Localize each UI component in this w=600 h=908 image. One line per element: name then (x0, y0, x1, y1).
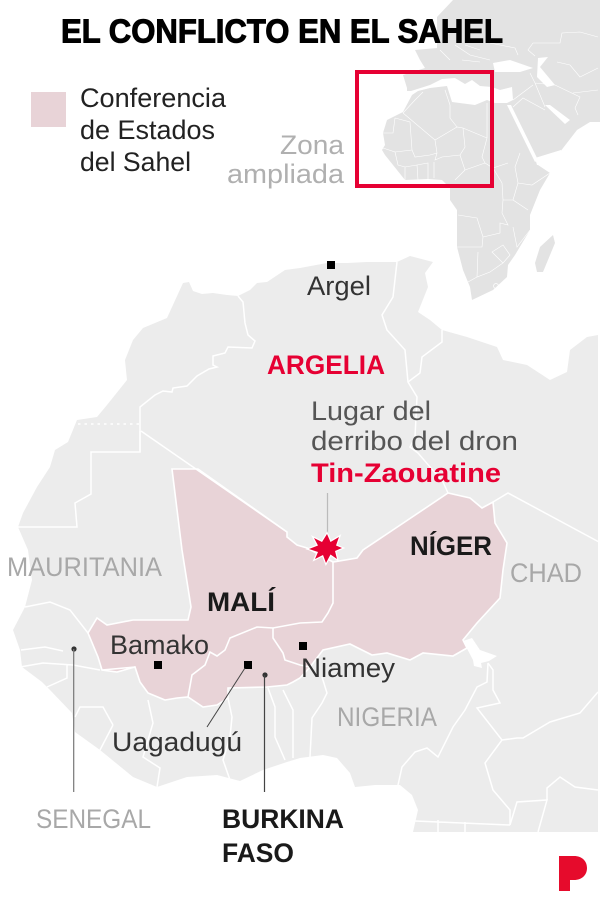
country label: Burkina Faso: FASO (222, 838, 294, 868)
city: Argel (307, 261, 371, 301)
inset: Red Sea (507, 105, 538, 162)
country label: Malí: MALÍ (207, 587, 276, 617)
country label: Níger: NÍGER (410, 531, 492, 561)
inset: Mediterranean Sea (411, 78, 513, 105)
legend (31, 83, 226, 177)
inset highlight rectangle (357, 72, 492, 186)
inset: land mass of Europe, Africa and Asia (382, 0, 600, 300)
label: Argel: Argel (307, 271, 371, 301)
inset: Lesotho outline (494, 284, 498, 288)
label: Uagadugú: Uagadugú (112, 727, 242, 757)
inset world locator map (382, 0, 600, 300)
label: Niamey: Niamey (301, 653, 396, 683)
city: Uagadugú (112, 661, 252, 757)
zoomed map: Conferencia de Estados del Sahel countries (88, 469, 507, 707)
country label: Burkina Faso: BURKINA (222, 804, 344, 834)
legend label: de Estados (80, 115, 215, 145)
icon: explosion star (309, 534, 342, 563)
dot: Senegal (71, 646, 77, 652)
country label: Mauritania: MAURITANIA (7, 552, 162, 582)
inset: Caspian Sea (537, 57, 555, 87)
leader line: Burkina Faso (264, 675, 266, 792)
zoomed map: internal borders of Mali, Burkina Faso and Niger (188, 562, 333, 697)
callout: drone shoot-down site (309, 396, 518, 563)
Burkina Faso pointer (262, 672, 268, 792)
callout text: Lugar del (311, 396, 431, 426)
zoomed map: country borders (18, 262, 599, 832)
dot: Burkina Faso (262, 672, 268, 678)
city: Bamako (110, 630, 209, 669)
marker: Niamey (299, 642, 307, 650)
inset: Black Sea (493, 60, 533, 72)
inset: Persian Gulf (545, 105, 570, 124)
country label: Argelia: ARGELIA (267, 350, 385, 380)
Senegal pointer (71, 646, 77, 792)
callout place name: Tin-Zaouatine (311, 458, 501, 488)
callout leader line (326, 493, 328, 535)
legend label: Conferencia (80, 83, 226, 113)
logo: P (559, 856, 587, 891)
legend label (80, 83, 226, 177)
inset label: zona ampliada: Zona (280, 130, 344, 160)
dotted border Western Sahara (78, 423, 140, 425)
marker: Bamako (154, 661, 162, 669)
callout text (311, 396, 518, 456)
zoomed map: land base (13, 256, 598, 832)
country label: Senegal: SENEGAL (36, 804, 151, 834)
country label: Chad: CHAD (510, 558, 582, 588)
country label: Nigeria: NIGERIA (337, 702, 437, 732)
label: Bamako: Bamako (110, 630, 209, 660)
Lake Chad (463, 638, 497, 668)
legend swatch (31, 92, 66, 127)
inset label: zona ampliada: ampliada (227, 159, 344, 189)
inset: Madagascar (535, 235, 555, 272)
legend label: del Sahel (80, 147, 191, 177)
inset label: zona ampliada (227, 130, 344, 189)
country label: Burkina Faso (222, 804, 344, 868)
marker: Argel (327, 261, 335, 269)
city: Niamey (299, 642, 396, 683)
callout text: derribo del dron (311, 426, 518, 456)
title: EL CONFLICTO EN EL SAHEL (61, 12, 503, 50)
leader line: Uagadugú (207, 668, 245, 727)
inset: borders (383, 32, 598, 282)
leader line: Senegal (73, 649, 75, 792)
marker: Uagadugú (244, 661, 252, 669)
inset: Gulf of Aden (535, 150, 562, 165)
